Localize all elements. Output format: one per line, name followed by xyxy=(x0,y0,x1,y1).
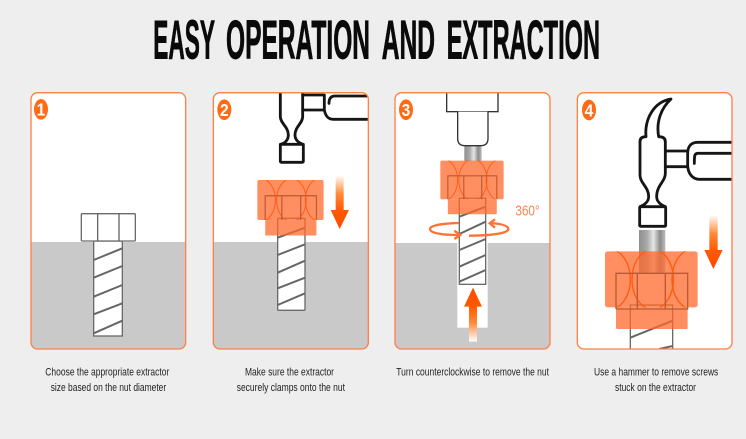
caption: step 2: Make sure the extractor xyxy=(245,366,334,378)
drill shaft xyxy=(464,146,482,161)
rotation arrows xyxy=(430,219,508,239)
caption: step 2: securely clamps onto the nut xyxy=(237,382,345,394)
caption: step 1: size based on the nut diameter xyxy=(51,382,166,394)
ground xyxy=(395,243,550,349)
panel: step 1 xyxy=(31,93,186,349)
arrow: down xyxy=(331,175,349,229)
panel background xyxy=(395,93,550,349)
panel: step 2 xyxy=(213,92,372,349)
caption: step 1 xyxy=(45,366,170,394)
panel background xyxy=(31,93,186,349)
caption: step 1: Choose the appropriate extractor xyxy=(45,366,170,378)
panel border xyxy=(577,93,732,349)
ground xyxy=(31,242,186,349)
metal shaft xyxy=(639,230,665,273)
extractor xyxy=(257,180,324,236)
icon: hammer xyxy=(640,99,734,226)
panel border xyxy=(31,93,186,349)
panel border xyxy=(395,93,550,349)
title: OPERATION xyxy=(226,9,370,70)
badge 1 xyxy=(34,99,48,120)
bolt shank xyxy=(278,218,305,310)
arrow: down xyxy=(704,215,723,269)
badge 2: 2 xyxy=(220,100,229,120)
title: EASY xyxy=(153,9,215,70)
badge 1: 1 xyxy=(37,100,45,120)
panel: step 3 xyxy=(395,90,550,349)
badge 3 xyxy=(399,99,413,120)
badge 4: 4 xyxy=(585,100,593,120)
bolt shank xyxy=(94,241,122,336)
hole xyxy=(457,243,488,328)
badge 2 xyxy=(217,99,231,120)
bolt shank xyxy=(459,198,486,284)
badge 4 xyxy=(582,100,596,120)
panel background xyxy=(577,93,732,349)
bolt head xyxy=(81,214,135,241)
ground xyxy=(213,242,368,349)
caption: step 3: Turn counterclockwise to remove the nut xyxy=(396,366,549,378)
arrow: up xyxy=(464,288,482,342)
extractor xyxy=(440,160,504,214)
title: AND xyxy=(382,9,435,70)
extractor xyxy=(605,251,698,329)
caption: step 4 xyxy=(594,366,719,394)
bolt shank xyxy=(630,305,673,352)
drill chuck xyxy=(447,90,498,146)
caption: step 4: stuck on the extractor xyxy=(615,382,696,394)
panel background xyxy=(213,93,368,349)
icon: hammer xyxy=(280,92,372,162)
panel border xyxy=(213,93,368,349)
caption: step 2 xyxy=(237,366,345,394)
panel: step 4 xyxy=(577,93,734,352)
label: 360 degrees: 360° xyxy=(515,203,540,220)
badge 3: 3 xyxy=(402,100,410,120)
